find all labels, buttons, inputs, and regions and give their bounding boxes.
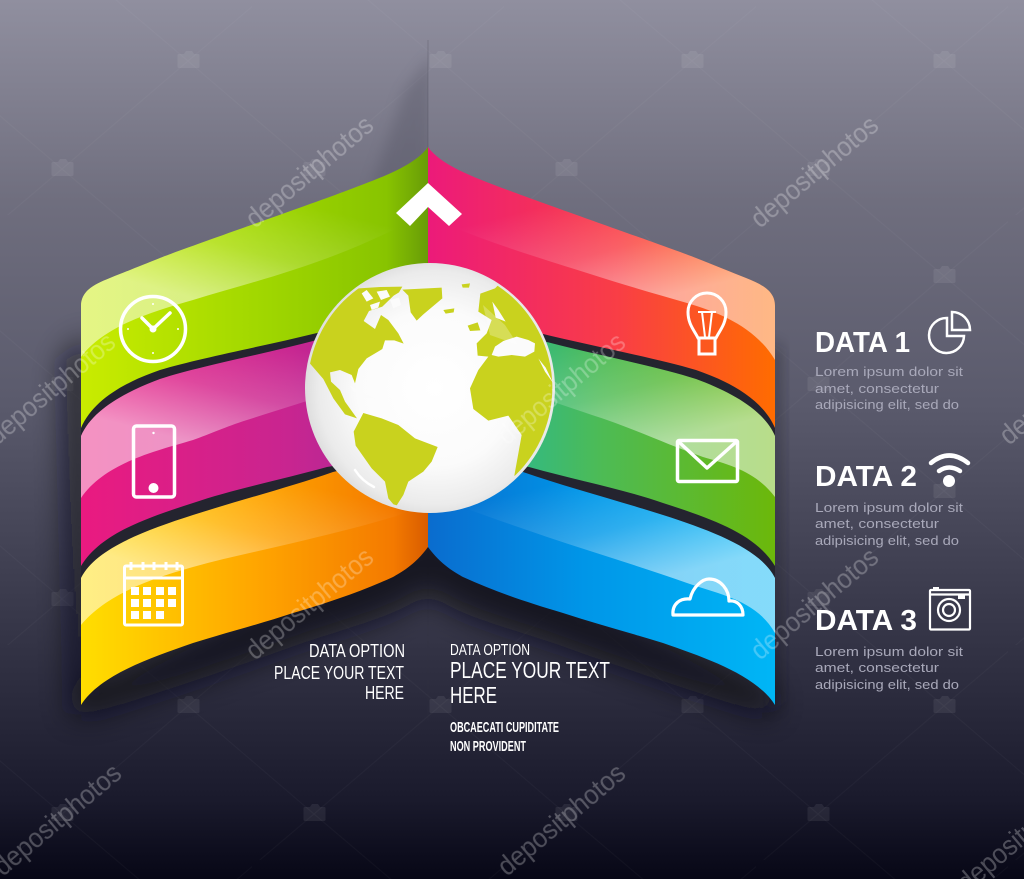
- text: data 2 description: [815, 500, 963, 548]
- text block: left data option: [274, 641, 405, 703]
- panel: data 1: [815, 312, 970, 412]
- white seas and islands on the globe: [350, 290, 553, 399]
- icon: light bulb: [688, 293, 726, 354]
- globe rim reflection: [355, 470, 374, 487]
- watermarks: depositphotos: [491, 757, 631, 879]
- panel: left ribbons: [81, 147, 428, 705]
- text: data 2 description: amet, consectetur: [815, 516, 940, 531]
- dark gaps between left ribbons: [81, 290, 428, 600]
- text: data 1 description: adipisicing elit, sed do: [815, 397, 959, 412]
- watermarks: depositphotos: [239, 541, 379, 666]
- text block: right data option: OBCAECATI CUPIDITATE: [450, 719, 559, 736]
- text: data 1 description: Lorem ipsum dolor sit: [815, 364, 963, 379]
- panel: right ribbons: [428, 147, 775, 705]
- text: data 3 description: [815, 644, 963, 692]
- magenta ribbon gloss: [81, 310, 428, 498]
- icon: clock: [120, 296, 186, 362]
- watermarks: depositphotos: [744, 541, 884, 666]
- left ribbon: orange: [81, 450, 428, 705]
- left ribbon: green: [81, 147, 428, 428]
- icon: camera: [930, 587, 970, 630]
- green ribbon gloss: [81, 147, 428, 357]
- heading: data 1: DATA 1: [815, 327, 910, 359]
- watermarks: depositphotos: [744, 109, 884, 234]
- ribbon shadows: [64, 335, 772, 720]
- right ribbon: red: [428, 147, 775, 428]
- text: data 2 description: adipisicing elit, sed do: [815, 533, 959, 548]
- icon: phone: [134, 426, 174, 497]
- left ribbon: magenta: [81, 310, 428, 566]
- icon: envelope: [678, 440, 738, 482]
- icon: cloud: [673, 579, 743, 615]
- orange ribbon gloss: [81, 450, 428, 625]
- right edge shadow: [770, 340, 782, 712]
- teal ribbon gloss: [428, 310, 775, 497]
- icon: calendar: [124, 562, 183, 625]
- icon: wifi: [931, 456, 968, 487]
- text block: right data option: NON PROVIDENT: [450, 738, 526, 755]
- right ribbon: blue: [428, 450, 775, 705]
- center seam line: [428, 40, 429, 720]
- text: data 1 description: [815, 364, 963, 412]
- dark gaps between right ribbons: [428, 290, 775, 600]
- text block: right data option: PLACE YOUR TEXT: [450, 657, 610, 683]
- icon: up chevron: [396, 183, 462, 226]
- watermarks: depositphotos: [491, 326, 631, 451]
- globe: [305, 263, 555, 513]
- text block: right data option: HERE: [450, 682, 497, 708]
- panel: data 3: [815, 587, 970, 692]
- text block: right data option: DATA OPTION: [450, 642, 530, 659]
- globe highlight on Europe: [483, 305, 518, 345]
- text: data 2 description: Lorem ipsum dolor sit: [815, 500, 963, 515]
- globe continents: [310, 283, 552, 506]
- heading: data 3: DATA 3: [815, 605, 917, 637]
- text: data 1 description: amet, consectetur: [815, 381, 940, 396]
- globe sphere: [305, 263, 555, 513]
- red ribbon gloss: [428, 147, 775, 360]
- text block: left data option: PLACE YOUR TEXT: [274, 663, 404, 683]
- icon: pie chart: [929, 312, 970, 353]
- text block: right data option: [450, 642, 610, 755]
- text: data 3 description: adipisicing elit, sed do: [815, 677, 959, 692]
- text: data 3 description: amet, consectetur: [815, 660, 940, 675]
- watermarks: depositphotos: [239, 109, 379, 234]
- text block: left data option: HERE: [365, 683, 404, 703]
- center seam shadow: [378, 66, 428, 178]
- panel: data 2: [815, 456, 968, 548]
- right ribbon: teal green: [428, 310, 775, 566]
- text block: left data option: DATA OPTION: [309, 641, 405, 661]
- text: data 3 description: Lorem ipsum dolor sit: [815, 644, 963, 659]
- blue ribbon gloss: [428, 450, 775, 633]
- heading: data 2: DATA 2: [815, 461, 917, 493]
